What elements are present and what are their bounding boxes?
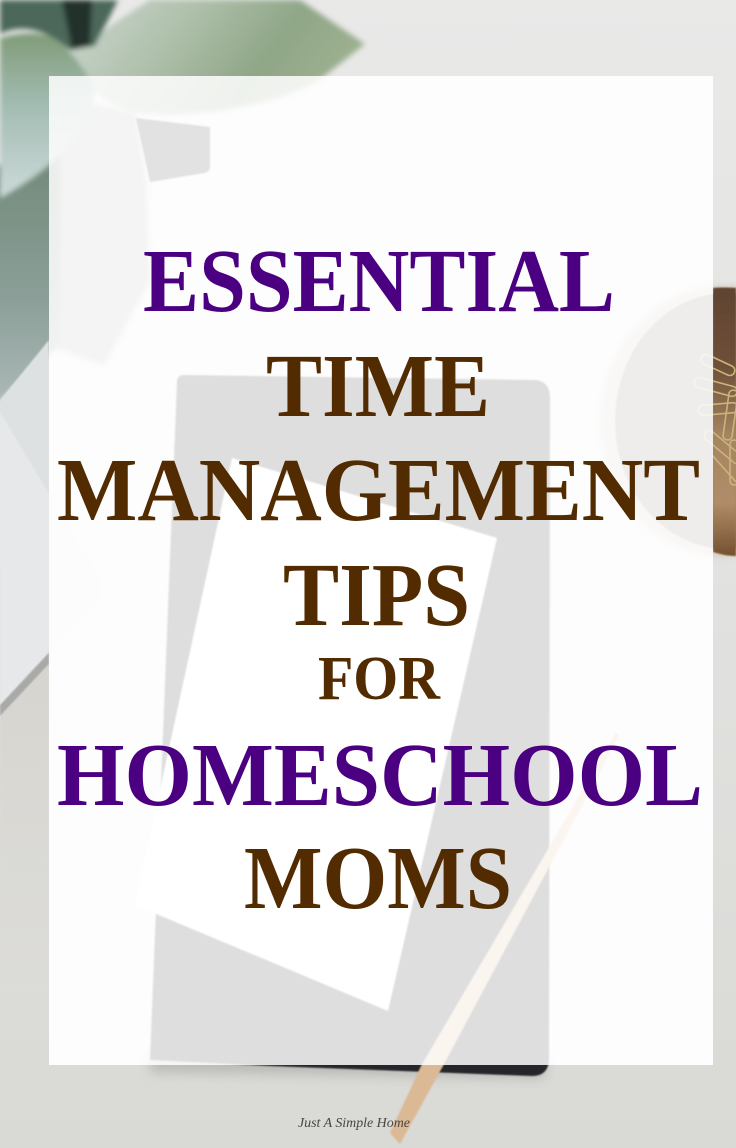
- white card on notebook: [135, 458, 497, 1011]
- gray backing leaf: [49, 95, 150, 366]
- title line: HOMESCHOOL: HOMESCHOOL: [57, 726, 703, 825]
- dark box behind leaves: [136, 118, 210, 182]
- wooden bowl with paperclips: [600, 285, 736, 557]
- title line: MOMS: MOMS: [244, 829, 512, 928]
- title line: FOR: FOR: [318, 645, 441, 713]
- title line: MANAGEMENT: MANAGEMENT: [57, 441, 700, 540]
- title line: TIPS: TIPS: [283, 546, 470, 645]
- translucent white panel: [49, 76, 713, 1065]
- title: [57, 232, 703, 928]
- notebook: [150, 375, 550, 1076]
- title line: TIME: TIME: [266, 337, 490, 436]
- title line: ESSENTIAL: ESSENTIAL: [143, 232, 615, 331]
- brand signature: Just A Simple Home: [298, 1116, 410, 1131]
- plant leaves: [0, 0, 365, 410]
- pencil: [390, 733, 619, 1144]
- laptop corner: [0, 340, 102, 1000]
- soft shadow under notebook: [150, 1056, 545, 1078]
